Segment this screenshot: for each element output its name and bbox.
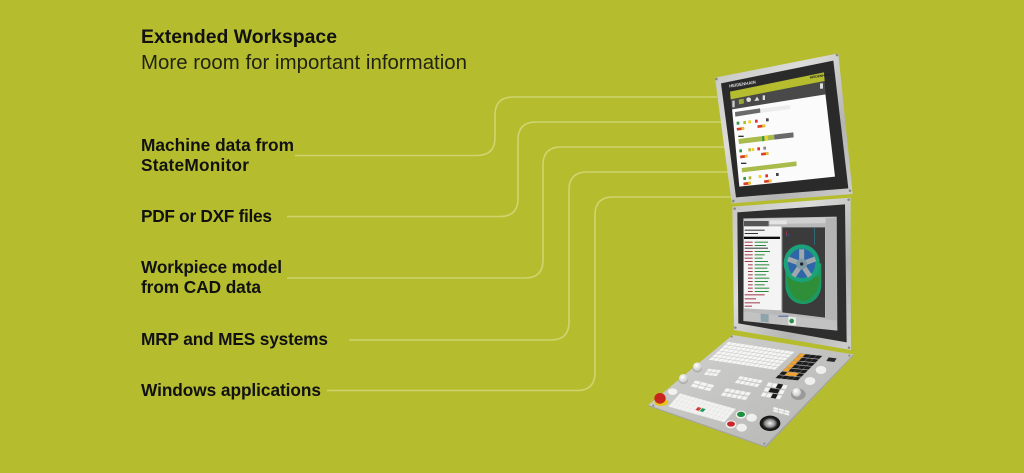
icon toolbar <box>731 81 826 109</box>
label: machine data from StateMonitor: StateMonitor <box>141 155 249 175</box>
white oval buttons <box>736 366 826 432</box>
connector: PDF or DXF <box>287 122 721 216</box>
label: workpiece model from CAD data <box>141 257 282 297</box>
horizontal softkey strip <box>743 312 837 331</box>
main alphanumeric keys <box>708 342 795 370</box>
connector: workpiece model <box>287 147 724 278</box>
green title band <box>730 72 825 99</box>
keyboard panel <box>648 335 854 448</box>
dashboard card 2 <box>738 132 794 158</box>
NC program listing <box>744 226 781 310</box>
rotary knob right <box>791 388 806 400</box>
lower monitor bezel <box>737 204 847 342</box>
lower keyboard <box>668 393 736 422</box>
dashboard card 3 <box>741 161 797 185</box>
small key group A <box>703 368 722 377</box>
label: PDF or DXF files: PDF or DXF files <box>141 206 272 226</box>
heading block <box>141 26 467 74</box>
3D workpiece view <box>782 227 825 318</box>
header logo text: HEIDENHAIN <box>729 80 756 89</box>
label: workpiece model from CAD data: Workpiece model <box>141 257 282 277</box>
rotary knob left upper <box>693 362 702 372</box>
trackball <box>760 416 780 431</box>
label: workpiece model from CAD data: from CAD data <box>141 277 261 297</box>
panel screws <box>652 336 850 445</box>
axis indicator <box>786 227 814 245</box>
program header tabs <box>744 220 787 226</box>
label: machine data from StateMonitor: Machine data from <box>141 135 294 155</box>
green start button <box>736 411 746 419</box>
label: Windows applications: Windows applications <box>141 380 321 400</box>
connector: machine data <box>295 97 717 156</box>
upper monitor bezel <box>721 61 848 197</box>
rotary knob left lower <box>679 374 688 384</box>
wheel model <box>784 244 821 304</box>
upper monitor frame <box>715 53 853 203</box>
upper monitor screws <box>715 54 851 202</box>
connector: Windows applications <box>327 197 733 390</box>
connector lines <box>287 97 733 390</box>
white page area <box>732 93 835 187</box>
upper monitor <box>715 53 853 203</box>
StateMonitor screen <box>729 72 835 187</box>
label: MRP and MES systems: MRP and MES systems <box>141 329 328 349</box>
lower monitor screws <box>733 198 850 349</box>
key group D <box>720 388 752 401</box>
connector: MRP and MES <box>349 172 728 340</box>
logo text in band: HEIDENHAIN <box>810 72 831 80</box>
lower monitor frame <box>732 198 851 350</box>
black key upper right <box>826 357 837 362</box>
dashboard card 1 <box>735 105 790 131</box>
lower monitor screen <box>743 217 837 331</box>
key group C <box>734 376 763 388</box>
subtitle: More room for important information <box>141 52 467 74</box>
small key group B <box>690 380 715 392</box>
label: machine data from StateMonitor <box>141 135 294 175</box>
round white button near stop <box>668 388 677 395</box>
numeric key group <box>760 382 788 400</box>
orange and black function keys <box>775 353 823 381</box>
labels <box>141 135 328 400</box>
three small keys <box>773 407 790 416</box>
red stop button <box>726 420 736 428</box>
control unit hardware <box>648 53 854 448</box>
vertical softkeys <box>826 218 837 321</box>
emergency stop button <box>654 393 668 406</box>
title: Extended Workspace <box>141 26 337 48</box>
lower monitor <box>732 198 851 350</box>
